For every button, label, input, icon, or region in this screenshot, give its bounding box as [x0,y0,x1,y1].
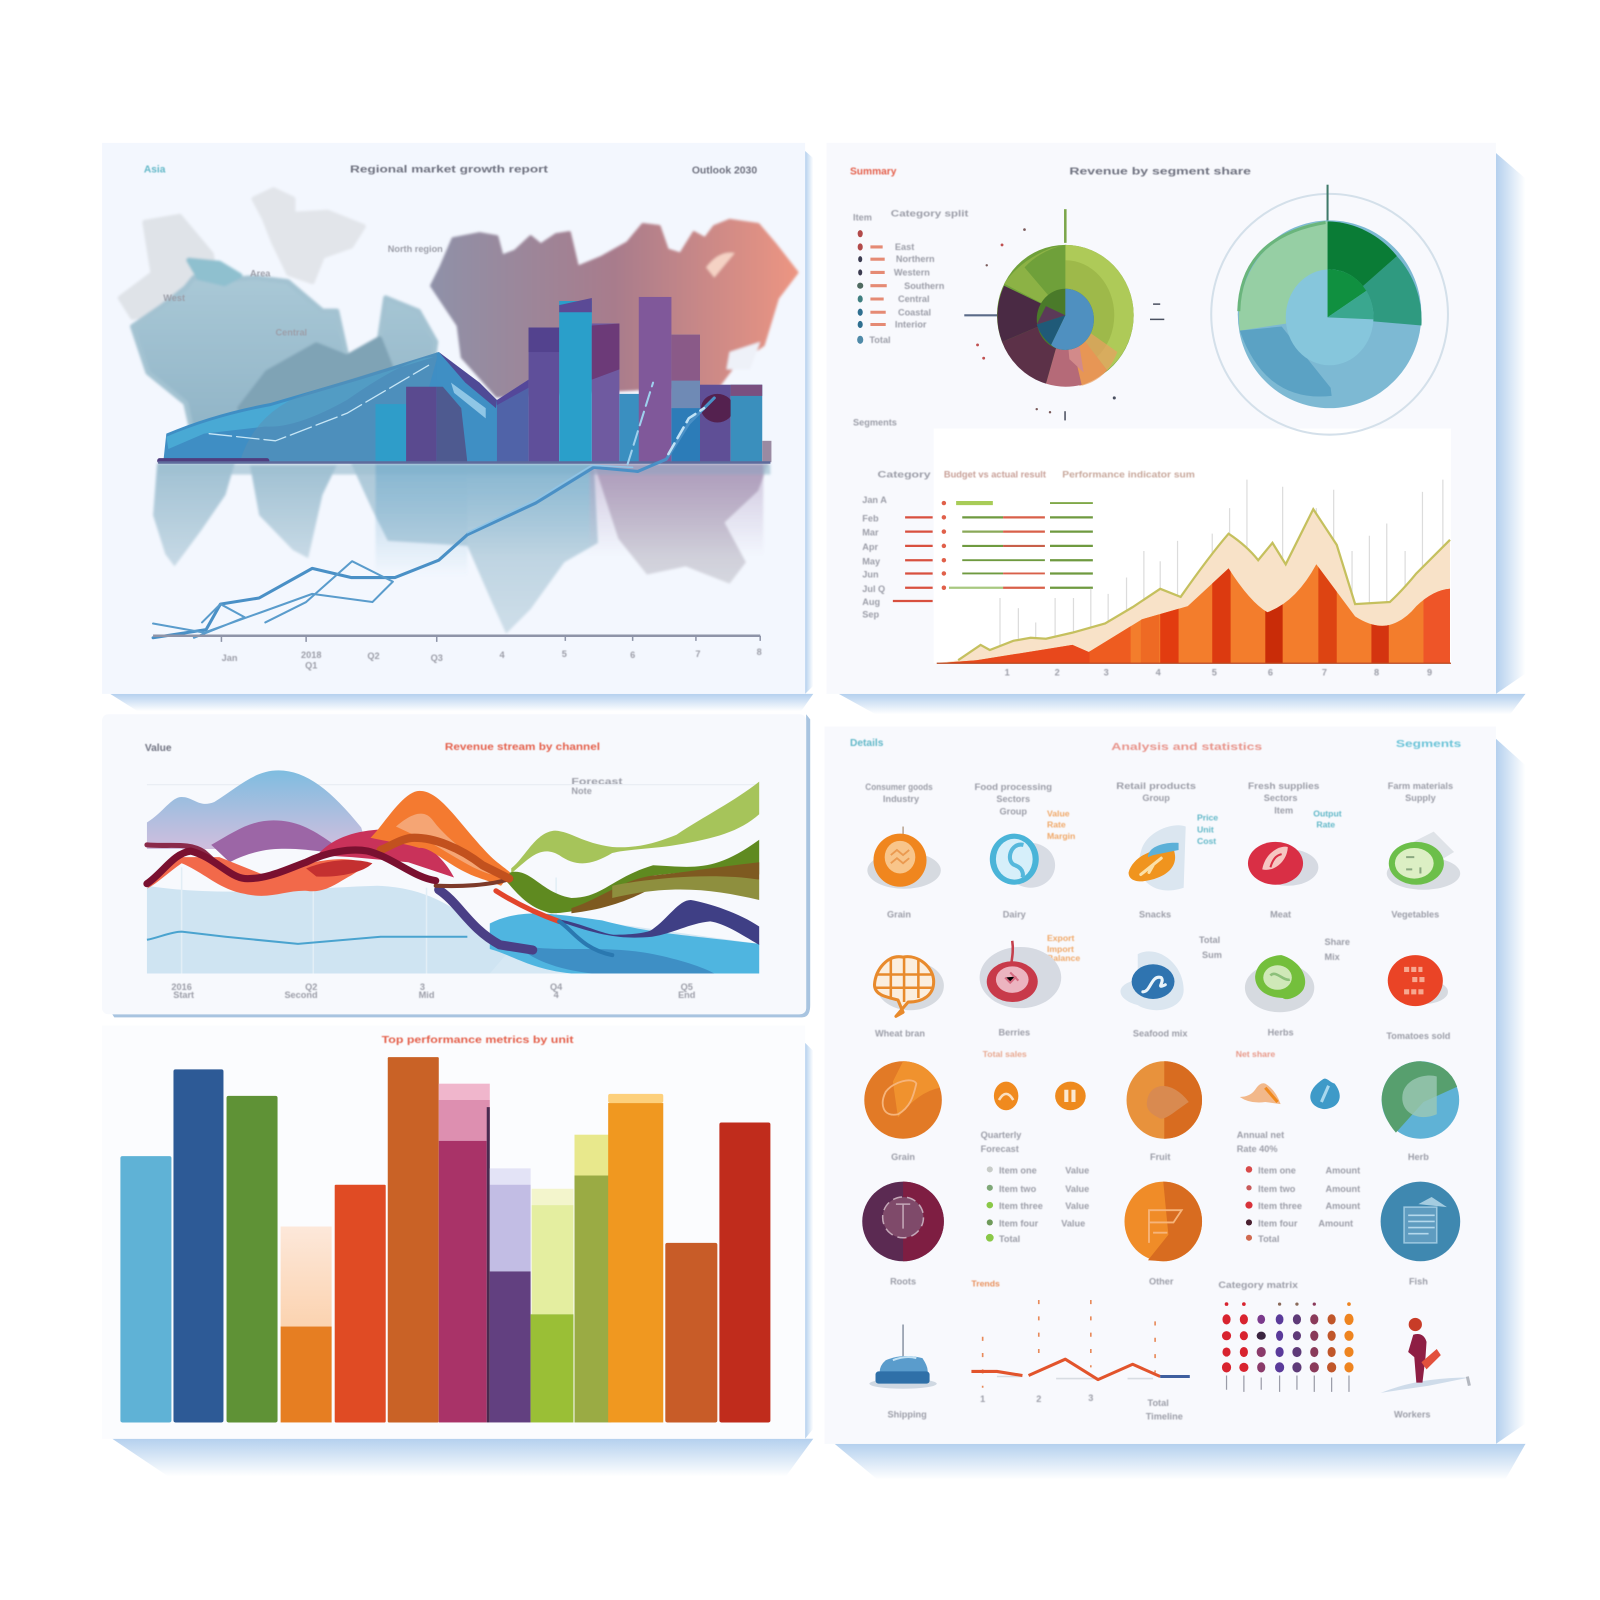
icon: green leaf [1245,955,1314,1012]
stream heading: Revenue stream by channel [445,742,600,753]
stream axis labels: 3 [420,982,425,992]
panel 5 headings: Rate [1316,820,1335,830]
mid lists and labels: Value [1065,1201,1089,1211]
panel 1 headings: Regional market growth report [350,164,549,175]
icon: orange circle 3 [1124,1182,1202,1261]
area chart table: Budget vs actual result [944,470,1046,480]
white plot area [934,429,1451,663]
panel 5 headings: Export [1047,933,1074,943]
panel 5 headings: Berries [998,1028,1030,1038]
pie legend: Western [894,268,930,278]
x axis: 7 [695,649,701,659]
area chart table: Performance indicator sum [1062,470,1195,480]
pie chart large with ring [1211,185,1448,435]
list bullet dots [986,1166,1253,1242]
panel: colourful bar chart [102,1026,813,1477]
mid lists and labels: Grain [891,1152,915,1162]
area chart: 5 [1212,668,1217,678]
panel 1 headings [144,164,757,176]
panel 5 headings: Balance [1047,953,1080,963]
area chart: 2 [1055,668,1060,678]
icon: orange circle 2 [1127,1061,1202,1139]
panel 5 headings: Vegetables [1391,909,1439,919]
panel 5 headings: Tomatoes sold [1386,1031,1450,1041]
bars [120,1057,770,1422]
icon: blue fish [1120,951,1184,1010]
mid lists and labels: Rate 40% [1237,1144,1278,1154]
area chart table: Aug [862,597,880,607]
icon: person figure [1381,1318,1469,1393]
icon: red berry [980,941,1061,1008]
stream axis labels: Second [284,990,318,1000]
panel 5 headings: Unit [1197,825,1214,835]
pie legend [857,230,945,345]
icon: orange leaf [1129,825,1186,890]
small orange dot [1055,1082,1086,1110]
mid lists and labels: Annual net [1237,1130,1284,1140]
blue area under bars [163,352,500,462]
stream axis labels: Q5 [681,982,693,992]
mid lists and labels: Amount [1326,1201,1360,1211]
stream axis labels: Q4 [550,982,563,992]
x axis: Q1 [305,660,317,670]
mid lists and labels: Value [1065,1165,1089,1175]
pie legend: Interior [895,320,927,330]
panel 5 headings: Import [1047,944,1074,954]
panel 5 headings: Sectors [1264,793,1297,803]
stream axis labels: 4 [554,990,560,1000]
panel 5 headings: Output [1313,808,1342,818]
panel 5 headings: Meat [1270,909,1291,919]
stream graph [147,770,759,973]
mid lists and labels: Quarterly [981,1130,1022,1140]
icon: red tomato [1388,955,1448,1006]
panel 5 headings: Price [1197,812,1218,822]
mid lists and labels: Value [1065,1184,1089,1194]
pie legend: East [895,242,914,252]
mid lists and labels: Fish [1409,1277,1428,1287]
area chart: 4 [1156,668,1162,678]
panel: world map with bars [102,143,813,711]
area chart: 9 [1427,668,1432,678]
mid lists and labels: Item three [1258,1201,1302,1211]
mid lists and labels: Amount [1326,1165,1360,1175]
icon: green vegetable [1387,832,1460,890]
area chart table: Jan A [862,495,887,505]
panel 5 headings: Cost [1197,836,1216,846]
bar chart title: Top performance metrics by unit [382,1035,574,1046]
small blue drop [1310,1079,1340,1109]
mid lists and labels: Total [999,1234,1020,1244]
mid lists and labels: Total [1258,1234,1279,1244]
panel 5 headings: Industry [883,794,920,804]
mid lists and labels: Item two [999,1184,1037,1194]
icon: ship [869,1324,937,1389]
mid lists and labels: Herb [1408,1152,1429,1162]
area chart table: Jul Q [862,584,885,594]
small orange pill [994,1082,1018,1110]
area chart table: Jun [862,570,879,580]
panel 5 headings: Sectors [996,794,1030,804]
small line chart: 3 [1088,1393,1093,1403]
panel 5 headings: Grain [887,909,911,919]
x axis: 6 [630,650,635,660]
world map upper [120,190,797,439]
map labels: Area [250,269,271,279]
stream heading [145,742,622,796]
panel 5 headings: Consumer goods [865,782,933,792]
infographic dashboard collage [102,143,1526,1476]
panel 5 headings: Margin [1047,831,1075,841]
panel 5 headings: Food processing [974,782,1052,792]
mid lists and labels: Roots [890,1277,916,1287]
mid lists and labels: Workers [1394,1409,1431,1419]
mid lists and labels: Other [1149,1277,1174,1287]
panel 5 headings: Seafood mix [1133,1029,1188,1039]
panel 5 headings: Item [1274,805,1293,815]
x axis: 5 [562,649,567,659]
small line chart: Total [1148,1398,1169,1408]
mid lists and labels: Item three [999,1201,1043,1211]
icon row 1 [867,825,1460,890]
stream axis labels: Mid [419,990,434,1000]
icon row 2 [874,941,1448,1016]
panel: pie charts and area chart [827,143,1526,714]
area chart: 3 [1104,668,1109,678]
large circle icons [862,1061,1460,1261]
icon: blue ring [990,834,1055,888]
icon: green blue circle [1382,1061,1459,1139]
stream axis labels: End [678,990,695,1000]
x axis: Jan [222,653,238,663]
panel 5 headings: Herbs [1268,1028,1294,1038]
stream axis labels: 2016 [171,982,192,992]
area chart table: Apr [862,542,878,552]
panel 5 headings: Rate [1047,820,1066,830]
pie legend: Northern [896,254,935,264]
panel 2 headings: Segments [853,418,897,428]
mid lists and labels: Net share [1236,1049,1275,1059]
pie scatter dots [976,228,1116,420]
area chart: 7 [1322,668,1327,678]
mid lists and labels: Timeline [1146,1411,1183,1421]
icon: red fruit [1248,842,1318,886]
area chart table: Category [878,470,932,480]
panel 5 headings: Share [1324,937,1350,947]
bar chart over map [157,297,771,464]
rising trend lines [153,365,714,638]
panel 2 headings: Item [853,212,872,222]
mid lists and labels: Item one [999,1165,1037,1175]
panel 5 headings: Sum [1202,950,1222,960]
panel 5 headings: Value [1047,808,1070,818]
small hand icon [1240,1083,1281,1104]
icon: purple circle [862,1182,944,1261]
stream heading: Value [145,743,172,754]
panel 2 headings: Category split [891,208,968,218]
panel 5 headings: Farm materials [1388,781,1453,791]
panel 5 headings: Wheat bran [875,1029,925,1039]
panel 2 headings: Revenue by segment share [1069,166,1251,177]
mid lists and labels: Item one [1258,1165,1296,1175]
small line chart: 2 [1036,1394,1041,1404]
stream heading: Forecast [571,777,622,787]
area chart: 8 [1374,668,1379,678]
map labels [163,244,443,338]
mid lists and labels: Amount [1326,1184,1360,1194]
panel 5 headings: Total [1199,935,1220,945]
area chart [937,480,1451,678]
panel 5 headings: Group [1142,793,1170,803]
mid lists and labels: Item two [1258,1184,1296,1194]
x axis: Q3 [431,653,443,663]
mid lists and labels: Fruit [1150,1152,1170,1162]
x axis: Q2 [367,651,380,661]
stream axis labels [171,982,695,1000]
area chart: 1 [1005,668,1010,678]
pie chart small [964,209,1164,387]
dot matrix [1222,1302,1354,1392]
panel 1 headings: Asia [144,164,166,175]
mid lists and labels: Amount [1318,1219,1353,1229]
map labels: Central [276,328,307,338]
panel 2 headings [850,166,1251,428]
mid lists and labels: Forecast [981,1144,1019,1154]
mid lists and labels: Item four [1258,1219,1298,1229]
panel 5 headings: Fresh supplies [1248,781,1319,791]
stream axis labels: Start [173,990,194,1000]
area chart table [862,470,1195,619]
panel 1 headings: Outlook 2030 [692,165,757,176]
icon: blue circle [1381,1182,1460,1261]
icon: orange grain [867,827,941,889]
mid lists and labels: Item four [999,1219,1039,1229]
pie legend: Coastal [898,307,931,317]
pie legend: Total [869,335,891,345]
area chart: 6 [1268,668,1273,678]
panel 2 headings: Summary [850,166,897,177]
mid lists and labels: Trends [971,1279,1000,1289]
mid lists and labels: Value [1061,1219,1085,1229]
panel 5 headings: Analysis and statistics [1111,742,1263,753]
reflection of map [153,463,770,634]
icon: orange circle 1 [864,1061,942,1139]
x axis: 8 [757,647,762,657]
panel: icon grid [824,727,1526,1480]
panel 5 headings: Mix [1324,952,1341,962]
panel 5 headings: Group [1000,806,1027,816]
small line chart: 1 [980,1394,985,1404]
panel 5 headings: Details [850,738,884,749]
mid lists and labels: Shipping [888,1409,927,1419]
x axis [153,636,762,670]
map labels: North region [388,244,443,254]
panel 5 headings: Retail products [1116,781,1196,791]
pie legend: Southern [904,281,945,291]
pie legend: Central [898,294,930,304]
mid lists and labels: Category matrix [1218,1280,1299,1290]
map labels: West [163,293,185,303]
area chart table: Feb [862,513,879,523]
panel 5 headings: Snacks [1139,909,1171,919]
panel 5 headings [850,738,1462,1041]
area chart table: Sep [862,609,879,619]
panel 5 headings: Segments [1396,739,1462,750]
x axis: 4 [499,650,505,660]
area chart table: Mar [862,528,879,538]
mid lists and labels: Total sales [983,1049,1027,1059]
icon: orange net [874,956,944,1016]
panel: stream chart [102,714,810,1017]
stream heading: Note [571,786,592,796]
area chart table: May [862,556,881,566]
x axis: 2018 [301,650,321,660]
stream axis labels: Q2 [305,982,317,992]
mid lists and labels [888,1049,1431,1421]
panel 5 headings: Supply [1405,793,1437,803]
panel 5 headings: Dairy [1003,909,1027,919]
small line chart [971,1300,1190,1408]
